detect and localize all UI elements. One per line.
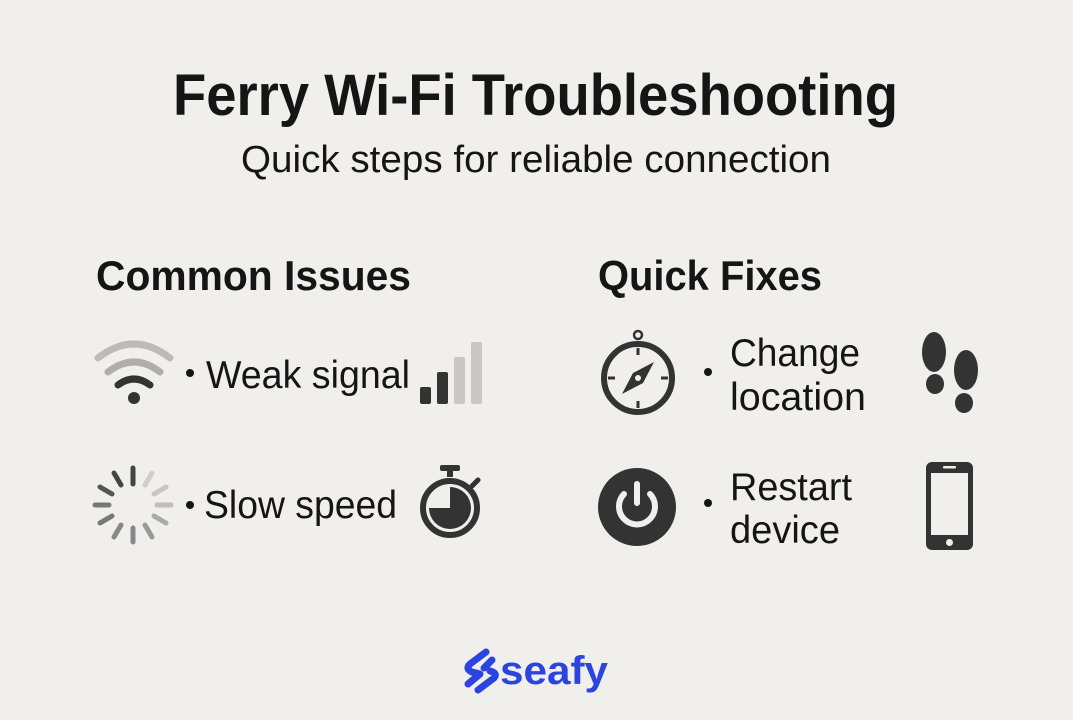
text: slow speed: Slow speed — [204, 484, 397, 527]
icon: footprints — [922, 332, 978, 413]
text: change location: Change — [730, 332, 860, 375]
panel: quick fixes — [598, 331, 978, 552]
subtitle: Quick steps for reliable connection — [241, 139, 831, 181]
icon: phone — [926, 462, 973, 550]
title: Ferry Wi-Fi Troubleshooting — [173, 63, 898, 128]
text: change location — [704, 332, 866, 419]
panel: common issues — [95, 342, 482, 542]
text: restart device: Restart — [730, 466, 852, 509]
icon: loading spinner — [95, 468, 171, 542]
text: restart device: device — [730, 509, 840, 552]
text: weak signal: Weak signal — [206, 354, 410, 397]
icon: power button — [598, 468, 676, 546]
icon: compass — [604, 331, 672, 412]
icon: stopwatch — [423, 465, 478, 535]
icon: wifi — [98, 344, 170, 404]
text: change location: location — [730, 376, 866, 419]
heading: quick fixes: Quick Fixes — [598, 252, 822, 299]
logo: seafy: seafy — [500, 649, 609, 693]
heading: common issues: Common Issues — [96, 252, 411, 299]
text: restart device — [704, 466, 852, 552]
icon: signal bars — [420, 342, 482, 404]
